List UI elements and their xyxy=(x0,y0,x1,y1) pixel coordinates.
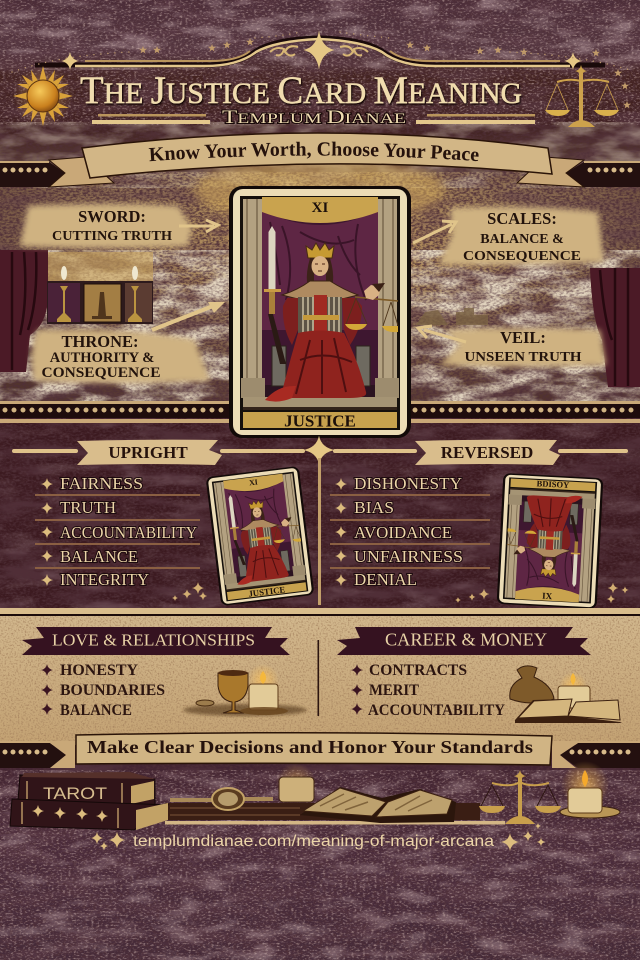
list: career: MERIT xyxy=(369,682,420,699)
reversed tarot card: BDISOY xyxy=(536,478,570,490)
ribbon: reversed: REVERSED xyxy=(441,443,533,462)
card name: JUSTICE xyxy=(284,412,356,430)
list: career: CONTRACTS xyxy=(369,662,467,679)
arrow: sword xyxy=(179,220,218,232)
arrow: scales xyxy=(413,221,456,243)
icon: pouch, candle and book xyxy=(510,666,622,723)
label: throne xyxy=(32,329,210,383)
arrow: veil xyxy=(418,326,466,342)
banner: Know Your Worth xyxy=(0,132,640,188)
right scene: curtain and distant city xyxy=(416,268,640,387)
panel: love and career parchment xyxy=(0,608,640,745)
label: throne: THRONE: xyxy=(61,332,139,351)
label: scales: CONSEQUENCE xyxy=(463,249,581,264)
reversed tarot card: IX xyxy=(542,591,553,601)
ribbon: love and relationships xyxy=(22,627,290,655)
list: love: BALANCE xyxy=(60,702,132,719)
ribbon: upright: UPRIGHT xyxy=(108,443,188,462)
icon: scales on table xyxy=(479,770,561,824)
label: throne: CONSEQUENCE xyxy=(42,365,160,381)
url footer xyxy=(91,823,545,851)
list: love xyxy=(41,662,165,719)
upright tarot card: JUSTICE xyxy=(248,584,286,599)
list: reversed meanings: DENIAL xyxy=(354,570,417,589)
sparkle stars xyxy=(172,582,629,603)
banner: Know Your Worth: Know Your Worth, Choose Your Peace xyxy=(148,142,479,162)
icon: candle on table xyxy=(276,763,316,803)
main tarot card xyxy=(229,186,411,438)
dotted divider band xyxy=(0,401,640,423)
icon: clasp xyxy=(170,788,273,810)
label: sword xyxy=(20,204,192,248)
icon: tarot books xyxy=(10,772,168,830)
banner: make clear decisions xyxy=(0,733,640,768)
list: love: BOUNDARIES xyxy=(60,682,165,699)
list: reversed meanings: DISHONESTY xyxy=(354,474,462,493)
upright tarot card xyxy=(206,466,314,606)
card numeral: XI xyxy=(312,200,328,216)
label: veil: UNSEEN TRUTH xyxy=(464,350,582,365)
label: throne: AUTHORITY & xyxy=(50,350,154,366)
list: upright meanings: FAIRNESS xyxy=(60,474,143,493)
list: upright meanings: TRUTH xyxy=(60,498,116,517)
list: upright meanings: ACCOUNTABILITY xyxy=(60,523,197,542)
ribbon: reversed xyxy=(415,440,560,465)
list: upright meanings xyxy=(35,474,490,589)
list: career: ACCOUNTABILITY xyxy=(368,702,505,719)
ribbon: career and money: CAREER & MONEY xyxy=(385,630,547,650)
list: reversed meanings xyxy=(335,474,463,589)
subtitle: Templum Dianae xyxy=(92,107,535,128)
list: reversed meanings: UNFAIRNESS xyxy=(354,547,463,566)
icon: tarot books: TAROT xyxy=(43,784,107,803)
icon: scales top right xyxy=(545,65,619,127)
label: veil xyxy=(440,328,606,366)
upright tarot card: XI xyxy=(249,477,258,487)
ribbon: upright xyxy=(77,440,222,465)
upright and reversed headers xyxy=(14,436,626,605)
ribbon: career and money xyxy=(337,627,591,655)
icon: goblet and candle xyxy=(183,664,307,716)
ribbon: love and relationships: LOVE & RELATIONSHIPS xyxy=(52,630,255,650)
arrow: throne xyxy=(152,302,225,330)
list: upright meanings: INTEGRITY xyxy=(60,570,149,589)
list: reversed meanings: BIAS xyxy=(354,498,394,517)
header ornament xyxy=(12,30,631,108)
label: veil: VEIL: xyxy=(500,328,546,347)
left scene: curtain and candlesticks xyxy=(0,250,153,372)
icon: open book xyxy=(300,787,456,823)
subtitle: Templum Dianae: TEMPLUM D IANAE xyxy=(222,107,406,128)
label: sword: SWORD: xyxy=(78,207,146,226)
list: career xyxy=(351,662,505,719)
icon: sun xyxy=(13,66,73,126)
label: sword: CUTTING TRUTH xyxy=(52,229,172,244)
list: reversed meanings: AVOIDANCE xyxy=(354,523,452,542)
table shelf xyxy=(165,803,505,824)
title: THE JUSTICE CARD MEANING xyxy=(80,69,522,112)
list: love: HONESTY xyxy=(60,662,138,679)
label: scales xyxy=(438,207,604,265)
reversed tarot card xyxy=(497,473,603,609)
url footer: templumdianae.com/meaning-of-major-arcana xyxy=(133,833,494,850)
list: upright meanings: BALANCE xyxy=(60,547,138,566)
label: scales: SCALES: xyxy=(487,209,557,228)
label: scales: BALANCE & xyxy=(480,232,564,247)
icon: large candle xyxy=(560,761,620,818)
banner: make clear decisions: Make Clear Decisions and Honor Your Standards xyxy=(87,737,533,757)
